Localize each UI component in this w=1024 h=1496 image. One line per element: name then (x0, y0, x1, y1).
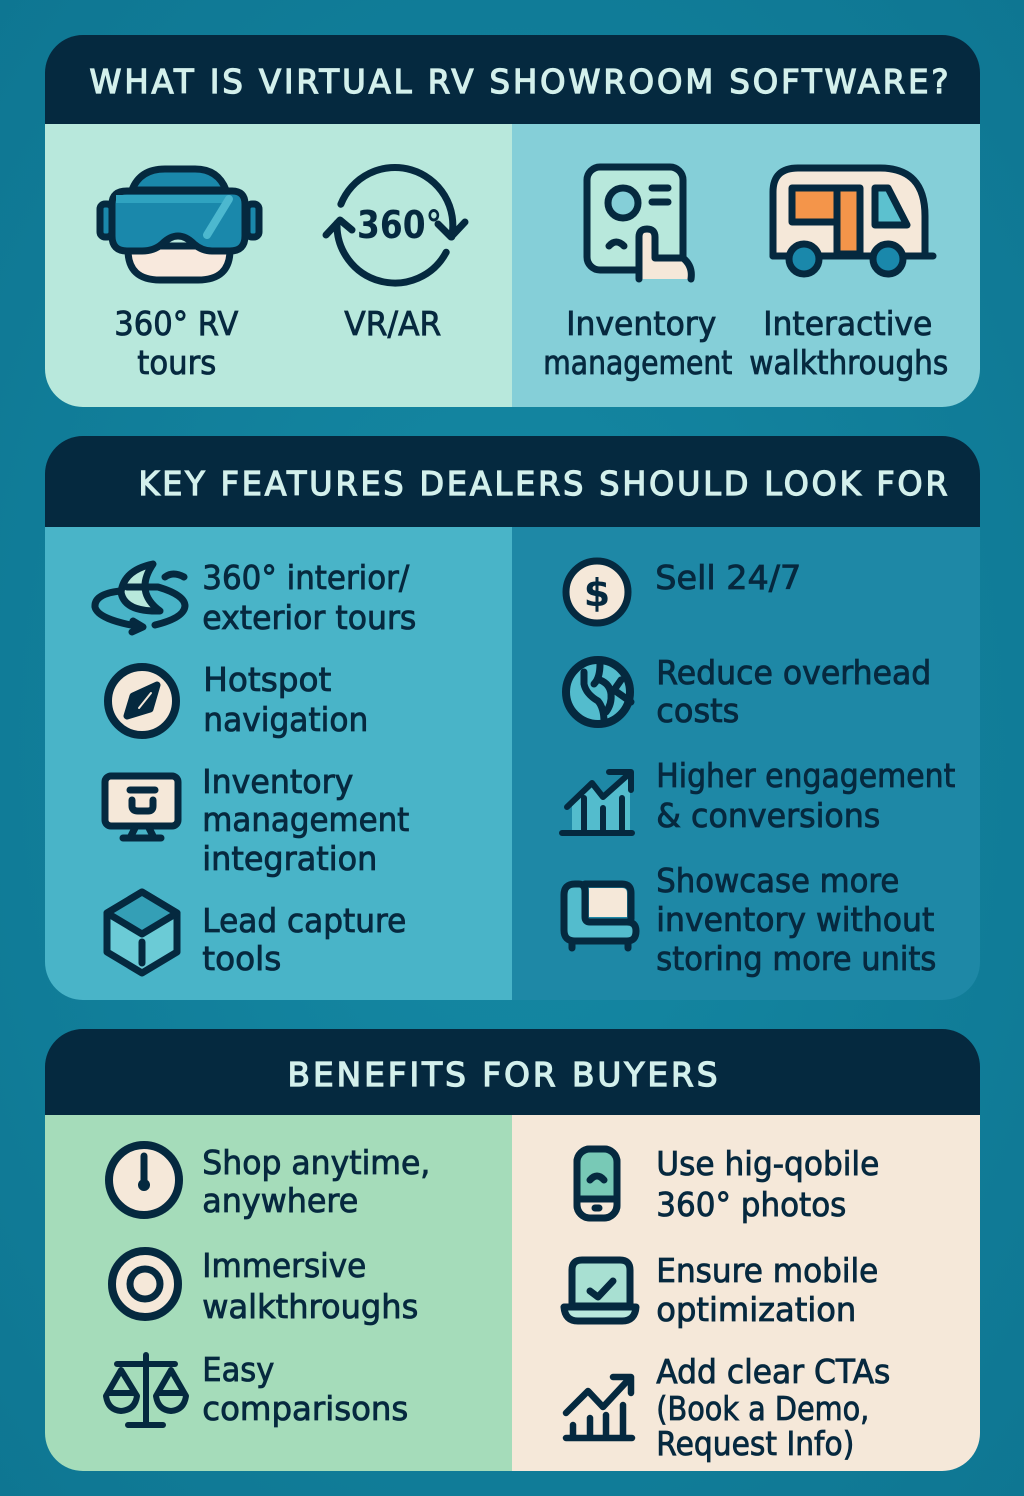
panel: benefits for buyers (45, 1029, 980, 1471)
text: buyer benefits list: walkthroughs (202, 1287, 418, 1326)
label: interactive walkthroughs (749, 304, 948, 382)
label: inventory management: management (543, 343, 732, 382)
text: dealer benefits list: Sell 24/7 (655, 558, 801, 597)
label: 360 RV tours: 360° RV (114, 304, 239, 343)
icon: dollar coin (566, 561, 628, 623)
text: best practices list (656, 1144, 890, 1463)
text: feature list: Lead capture (202, 901, 406, 940)
heading: benefits: BENEFITS FOR BUYERS (288, 1055, 720, 1094)
icon: dollar coin: $ (584, 571, 610, 615)
text: best practices list: (Book a Demo, (656, 1389, 869, 1428)
label: VR/AR: VR/AR (344, 304, 441, 343)
icon: compass (108, 667, 176, 735)
text: dealer benefits list: & conversions (656, 796, 880, 835)
icon: 360 arrows: 360° (357, 203, 442, 247)
text: buyer benefits list (202, 1143, 430, 1428)
heading: what is: WHAT IS VIRTUAL RV SHOWROOM SOFTWARE? (90, 62, 952, 101)
label: interactive walkthroughs: Interactive (763, 304, 932, 343)
panel: what is virtual RV showroom software (45, 35, 980, 407)
text: dealer benefits list: storing more units (656, 939, 936, 978)
text: buyer benefits list: Easy (202, 1350, 274, 1389)
text: dealer benefits list: Showcase more (656, 861, 899, 900)
icon: smartphone (577, 1149, 617, 1218)
label: 360 RV tours: tours (137, 343, 216, 382)
icon: globe (566, 660, 631, 724)
icon: monitor (105, 776, 178, 838)
text: feature list: navigation (203, 700, 368, 739)
icon: cube (107, 892, 177, 973)
icon: clock (109, 1145, 179, 1215)
icon: VR headset (100, 169, 259, 280)
text: best practices list: Ensure mobile (656, 1251, 878, 1290)
text: feature list: Inventory (202, 762, 353, 801)
text: feature list: Hotspot (203, 660, 331, 699)
text: best practices list: Add clear CTAs (656, 1352, 890, 1391)
icon: RV (773, 168, 933, 274)
text: dealer benefits list: Reduce overhead (656, 653, 931, 692)
icon: 360 orbit (95, 564, 185, 632)
text: feature list: integration (202, 839, 377, 878)
text: buyer benefits list: Immersive (202, 1246, 366, 1285)
icon: growth chart (562, 772, 632, 833)
text: dealer benefits list: costs (656, 691, 739, 730)
text: best practices list: optimization (656, 1290, 856, 1329)
text: buyer benefits list: Shop anytime, (202, 1143, 430, 1182)
text: feature list: exterior tours (202, 598, 416, 637)
text: buyer benefits list: comparisons (202, 1389, 408, 1428)
text: buyer benefits list: anywhere (202, 1181, 358, 1220)
text: best practices list: Use hig-qobile (656, 1144, 879, 1183)
icon: inventory touch screen (587, 167, 691, 279)
icon: scales (106, 1355, 186, 1425)
icon: laptop with check (564, 1260, 636, 1321)
icon: 360 arrows (326, 167, 465, 283)
text: dealer benefits list: inventory without (656, 900, 934, 939)
label: interactive walkthroughs: walkthroughs (749, 343, 948, 382)
text: best practices list: 360° photos (656, 1185, 846, 1224)
heading: key features: KEY FEATURES DEALERS SHOULD LOOK FOR (138, 464, 950, 503)
icon: target (112, 1251, 178, 1317)
panel: key features dealers should look for (45, 436, 980, 1000)
label: inventory management (543, 304, 732, 382)
label: inventory management: Inventory (566, 304, 716, 343)
text: best practices list: Request Info) (656, 1424, 854, 1463)
text: dealer benefits list (655, 558, 955, 978)
text: feature list: 360° interior/ (202, 558, 410, 597)
text: feature list: tools (202, 939, 281, 978)
label: 360 RV tours (114, 304, 239, 382)
text: feature list: management (202, 800, 409, 839)
text: dealer benefits list: Higher engagement (656, 756, 955, 795)
icon: sofa (564, 884, 636, 948)
icon: growth bars (566, 1377, 632, 1438)
text: feature list (202, 558, 416, 978)
